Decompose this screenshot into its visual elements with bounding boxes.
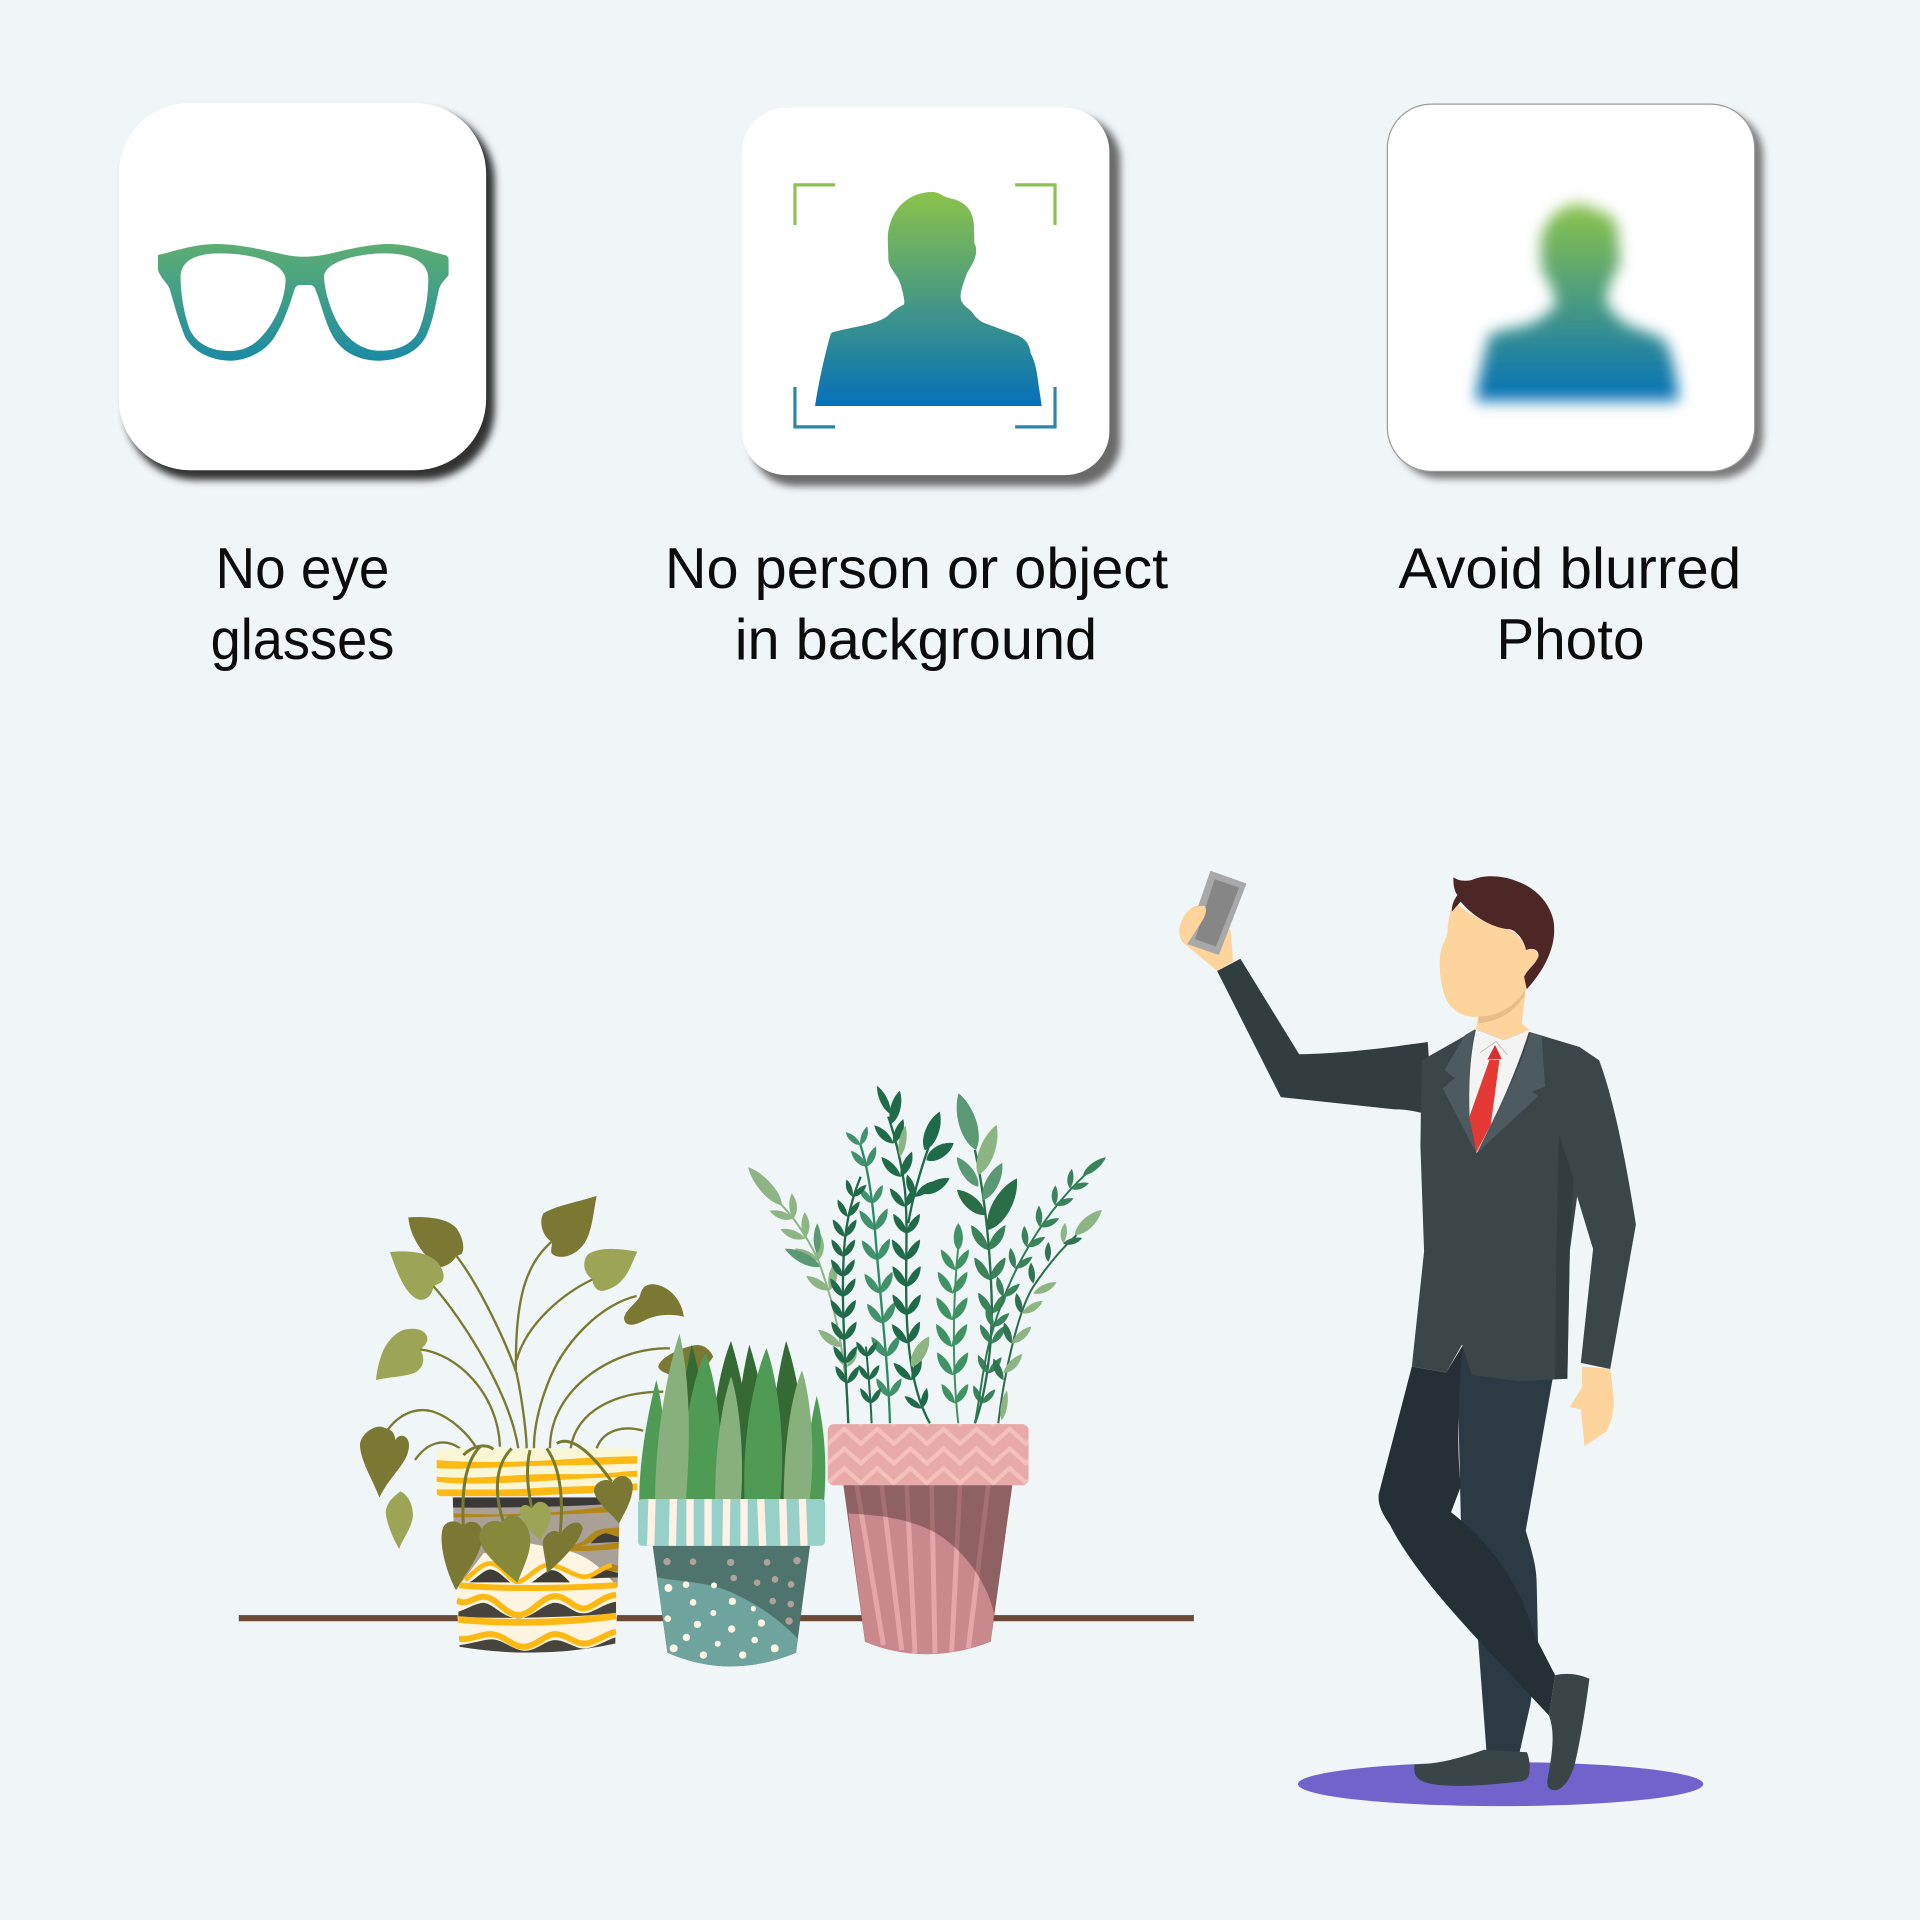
pot body <box>840 1483 1017 1660</box>
lapels <box>1443 1029 1545 1153</box>
tie <box>1469 1060 1499 1153</box>
light left sprig <box>744 1164 858 1423</box>
cream dots <box>664 1581 779 1659</box>
caption: no eye glasses: glasses <box>211 608 394 672</box>
neck shadow <box>1478 990 1525 1023</box>
tall dark sprig <box>874 1085 957 1423</box>
grey dots <box>663 1557 801 1625</box>
caption: avoid blurred photo: Photo <box>1496 608 1644 672</box>
yellow pot <box>437 1441 637 1663</box>
plant: trailing pothos in yellow pot <box>360 1196 713 1663</box>
standing shoe <box>1414 1750 1530 1786</box>
mid blades <box>639 1348 825 1501</box>
upper foliage <box>376 1196 713 1460</box>
phone <box>1187 872 1245 954</box>
hanging leaves <box>442 1521 482 1590</box>
shelf line <box>239 1615 1194 1621</box>
leaves <box>408 1217 463 1267</box>
face and neck <box>1440 902 1538 1040</box>
caption: no person or object in background: No person or object <box>665 537 1168 601</box>
caption: avoid blurred photo <box>1398 537 1741 672</box>
plant: rosemary in pink pot <box>744 1085 1108 1660</box>
hanging stems <box>463 1441 612 1533</box>
ground shadow ellipse <box>1298 1762 1703 1806</box>
right upper sprig <box>975 1155 1108 1423</box>
pink pot <box>828 1424 1029 1660</box>
thumb <box>1179 906 1206 945</box>
light blades <box>655 1333 812 1501</box>
raised hand <box>1179 905 1233 971</box>
pothos stems <box>383 1242 670 1460</box>
pot rim <box>638 1499 825 1546</box>
front leg <box>1379 1344 1555 1716</box>
right hand <box>1570 1367 1614 1446</box>
icon: person silhouette in frame <box>795 185 1055 427</box>
panel: no person or object card <box>742 108 1120 486</box>
icon: blurred person <box>1475 204 1679 401</box>
large-leaf sprig <box>950 1091 1025 1423</box>
pot rim <box>828 1424 1029 1485</box>
caption: no person or object in background <box>665 537 1168 672</box>
mid green sprig <box>936 1223 969 1423</box>
caption: avoid blurred photo: Avoid blurred <box>1398 537 1741 601</box>
right lower sprig <box>990 1206 1106 1423</box>
pot rim <box>437 1448 637 1496</box>
caption: no person or object in background: in background <box>735 608 1097 672</box>
leaf behind succulent <box>658 1345 713 1380</box>
jacket crease <box>1555 1134 1573 1379</box>
raised shoe <box>1547 1674 1589 1790</box>
hair <box>1452 876 1554 989</box>
rosemary sprigs <box>744 1085 1108 1423</box>
jacket <box>1412 1030 1636 1381</box>
pothos side leaves <box>360 1427 409 1498</box>
back leg <box>1457 1344 1553 1752</box>
panel: avoid blurred photo card <box>1387 104 1763 479</box>
pot body <box>452 1496 620 1653</box>
caption: no eye glasses <box>211 537 394 672</box>
figure: man taking selfie <box>1179 872 1703 1806</box>
pot lighter wedge <box>657 1577 797 1666</box>
short dark sprig <box>856 1342 881 1423</box>
dark blades <box>676 1341 804 1501</box>
teal sprig <box>846 1127 901 1423</box>
panel: no eye glasses card <box>119 103 495 480</box>
light accents <box>906 1333 934 1370</box>
plant: succulent in teal pot <box>638 1333 825 1666</box>
icon: eye glasses <box>158 244 449 361</box>
caption: no eye glasses: No eye <box>216 537 389 601</box>
shirt <box>1469 1029 1529 1153</box>
head, collar and tie <box>1440 876 1554 1153</box>
teal pot <box>638 1499 825 1666</box>
dark left sprig <box>830 1177 866 1423</box>
pot body <box>653 1546 810 1666</box>
collar crease <box>1480 1042 1507 1055</box>
tie knot <box>1487 1045 1502 1060</box>
raised arm sleeve <box>1217 959 1433 1116</box>
